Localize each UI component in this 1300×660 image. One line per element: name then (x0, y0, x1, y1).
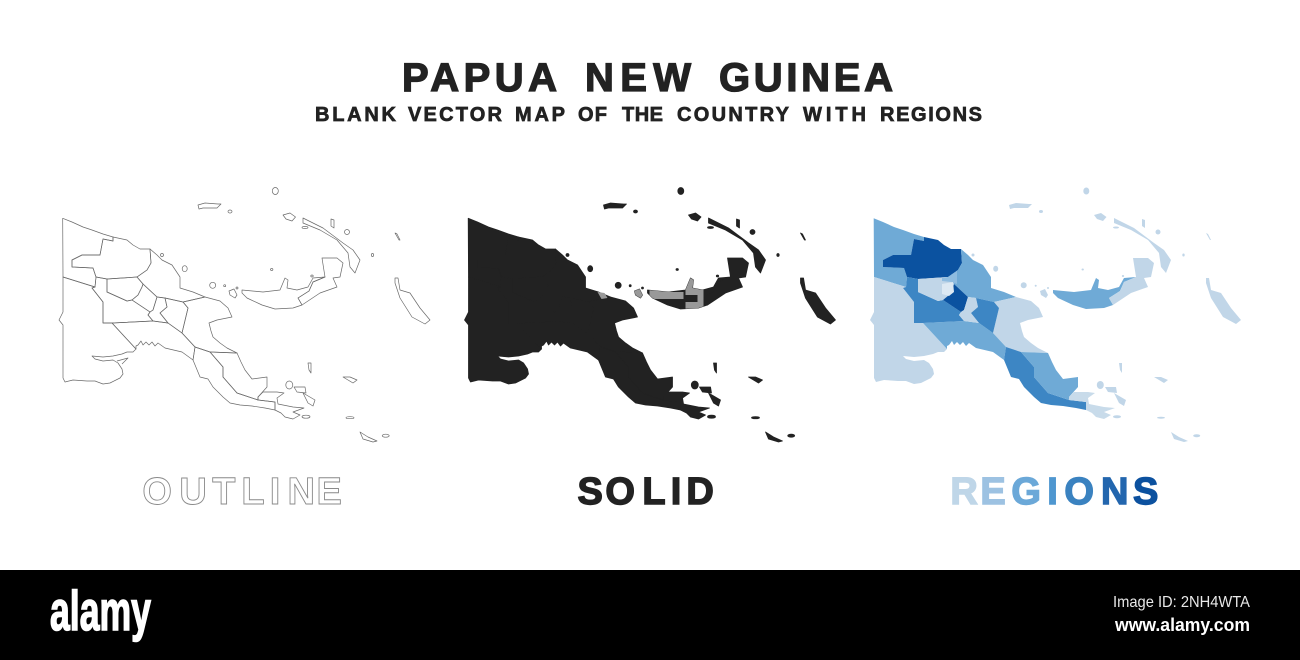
footer band (0, 570, 1300, 660)
region: Gulf (923, 321, 1006, 360)
region: Milne Bay (1069, 392, 1115, 419)
website: www.alamy.com (1114, 615, 1250, 635)
region: Sandaun (874, 218, 924, 287)
islands (972, 188, 1241, 442)
subtitle: THE (622, 104, 663, 126)
region: Southern Highlands (903, 277, 964, 323)
title: PAPUA (402, 56, 557, 100)
title: GUINEA (719, 56, 893, 100)
region: Western Highlands (943, 284, 968, 312)
region: West New Britain (1053, 277, 1136, 309)
label: solid: SOLID (578, 471, 714, 513)
region: Enga (918, 277, 954, 301)
map: outline version (59, 188, 430, 442)
title: NEW (585, 56, 691, 100)
region: East New Britain (1109, 258, 1154, 305)
subtitle: BLANK (315, 104, 397, 126)
subtitle: REGIONS (880, 104, 982, 126)
subtitle: OF (578, 104, 607, 126)
logo: alamy: alamy (50, 579, 151, 642)
subtitle: WITH (803, 104, 866, 126)
label: outline: OUTLINE (142, 471, 342, 513)
region: Eastern Highlands (971, 298, 999, 333)
title (402, 56, 893, 100)
watermark tint patch (942, 271, 957, 284)
region: Western (870, 277, 947, 384)
region: Central (1004, 347, 1086, 410)
region: Oro (1021, 352, 1078, 400)
region: East Sepik (883, 237, 962, 279)
label: regions: REGIONS (950, 471, 1158, 513)
region: Simbu (959, 297, 979, 323)
subtitle: COUNTRY (677, 104, 790, 126)
subtitle: MAP (515, 104, 565, 126)
region: Morobe (993, 297, 1048, 353)
image id: Image ID: 2NH4WTA (1113, 594, 1250, 611)
watermark light patch (942, 282, 954, 296)
region: Madang (948, 249, 1016, 302)
map: solid version (464, 188, 836, 442)
subtitle (315, 104, 982, 126)
subtitle: VECTOR (408, 104, 503, 126)
map: regions version (870, 188, 1241, 442)
